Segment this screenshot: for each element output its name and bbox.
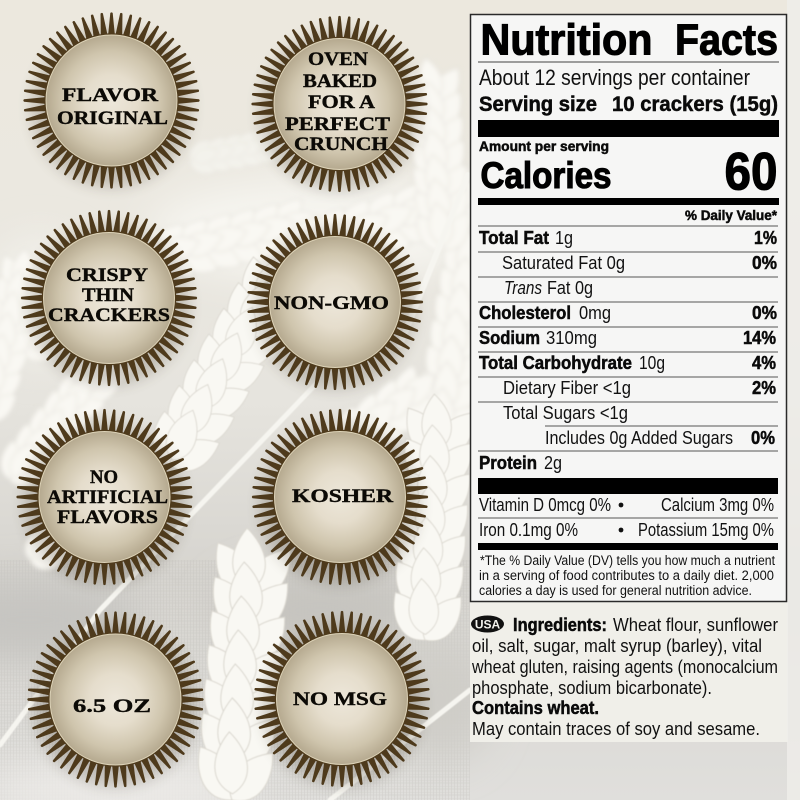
badge: no artificial flavors: NO [90, 467, 118, 488]
badge: oven baked [238, 0, 451, 213]
badge: crispy thin crackers: THIN [82, 285, 134, 306]
row: sodium: Sodium [479, 327, 540, 348]
row: dietary fiber: Dietary Fiber <1g [503, 377, 631, 398]
footnote [479, 553, 775, 598]
badge: crispy thin crackers: CRISPY [66, 265, 148, 286]
badge: flavor original: FLAVOR [62, 85, 158, 106]
row: cholesterol [479, 302, 777, 323]
footnote: in a serving of food contributes to a daily diet. 2,000 [479, 568, 774, 583]
row: total carbohydrate: Total Carbohydrate [479, 352, 632, 373]
row: total sugars: Total Sugars <1g [503, 402, 628, 423]
badge: no msg [241, 591, 453, 800]
row: total fat: 1g [555, 227, 573, 248]
row: saturated fat: Saturated Fat 0g [502, 252, 625, 273]
row: trans fat [504, 277, 593, 298]
icon: usa badge: USA [475, 618, 500, 632]
row: total carbohydrate: 10g [639, 352, 665, 373]
ingredients backing panel [470, 602, 788, 742]
row: added sugars: 0% [751, 427, 775, 448]
ingredients text: Wheat flour, sunflower [613, 614, 778, 635]
row: cholesterol: 0% [752, 302, 777, 323]
badge: kosher: KOSHER [292, 486, 393, 507]
badge: crispy thin crackers [8, 190, 220, 407]
serving size [479, 92, 778, 116]
badge: net weight [14, 592, 227, 800]
badge: no artificial flavors: FLAVORS [57, 507, 158, 528]
badge: oven baked: CRUNCH [294, 134, 388, 155]
badge: kosher [239, 389, 451, 606]
badge: flavor original: ORIGINAL [57, 108, 168, 129]
badge: oven baked: FOR A [308, 92, 375, 113]
calories label: Calories [480, 155, 612, 196]
row: vitamin d and calcium [479, 494, 774, 515]
badge: crispy thin crackers: CRACKERS [48, 305, 170, 326]
calories value: 60 [724, 142, 778, 202]
row: saturated fat [502, 252, 777, 273]
row: dietary fiber [503, 377, 776, 398]
row: trans fat: Fat 0g [547, 277, 593, 298]
row: protein: 2g [544, 452, 562, 473]
footnote: *The % Daily Value (DV) tells you how much a nutrient [480, 553, 775, 568]
daily value header: % Daily Value* [685, 208, 778, 223]
row: total fat [479, 227, 777, 248]
icon: usa badge [471, 616, 504, 632]
row: trans fat: Trans [504, 277, 542, 298]
ingredients text: oil, salt, sugar, malt syrup (barley), vital [472, 635, 762, 656]
ingredients text: Contains wheat. [472, 697, 599, 718]
badge: no artificial flavors [3, 389, 216, 606]
badge: flavor original [10, 0, 223, 209]
amount per serving: Amount per serving [479, 139, 609, 154]
row: total fat: Total Fat [479, 227, 549, 248]
footnote: calories a day is used for general nutrition advice. [479, 583, 752, 598]
row: iron and potassium: Iron 0.1mg 0% [479, 519, 578, 540]
row: sodium: 14% [743, 327, 776, 348]
row: sodium: 310mg [546, 327, 597, 348]
row: vitamin d and calcium: Vitamin D 0mcg 0% [479, 494, 611, 515]
row: sodium [479, 327, 776, 348]
serving size: Serving size [479, 92, 597, 116]
row: dietary fiber: 2% [752, 377, 776, 398]
row: iron and potassium [479, 519, 774, 540]
row: added sugars: Includes 0g Added Sugars [545, 427, 733, 448]
badge: non-gmo [234, 194, 446, 411]
ingredients text: May contain traces of soy and sesame. [472, 718, 760, 739]
right edge strip [787, 0, 800, 800]
row: vitamin d and calcium: Calcium 3mg 0% [661, 494, 774, 515]
ingredients text: phosphate, sodium bicarbonate). [472, 677, 712, 698]
row: cholesterol: Cholesterol [479, 302, 571, 323]
row: protein: Protein [479, 452, 537, 473]
badge: no msg: NO MSG [293, 689, 387, 710]
row: total carbohydrate [479, 352, 776, 373]
servings text: About 12 servings per container [479, 65, 750, 90]
panel: nutrition facts [470, 14, 786, 602]
row: total fat: 1% [754, 227, 777, 248]
serving size: 10 crackers (15g) [612, 92, 778, 116]
heading: nutrition facts: Facts [675, 16, 778, 64]
row: saturated fat: 0% [752, 252, 777, 273]
row: total carbohydrate: 4% [752, 352, 776, 373]
ingredients text [471, 614, 778, 739]
badge: oven baked: BAKED [303, 71, 377, 92]
row: cholesterol: 0mg [579, 302, 611, 323]
badge: non-gmo: NON-GMO [274, 293, 389, 314]
badge: oven baked: OVEN [308, 49, 368, 70]
badge: net weight: 6.5 OZ [73, 696, 151, 717]
badge: no artificial flavors: ARTIFICIAL [47, 487, 168, 508]
badge: oven baked: PERFECT [285, 114, 390, 135]
heading: nutrition facts: Nutrition [480, 16, 652, 64]
ingredients text: Ingredients: [513, 614, 607, 635]
heading: nutrition facts [480, 16, 778, 64]
